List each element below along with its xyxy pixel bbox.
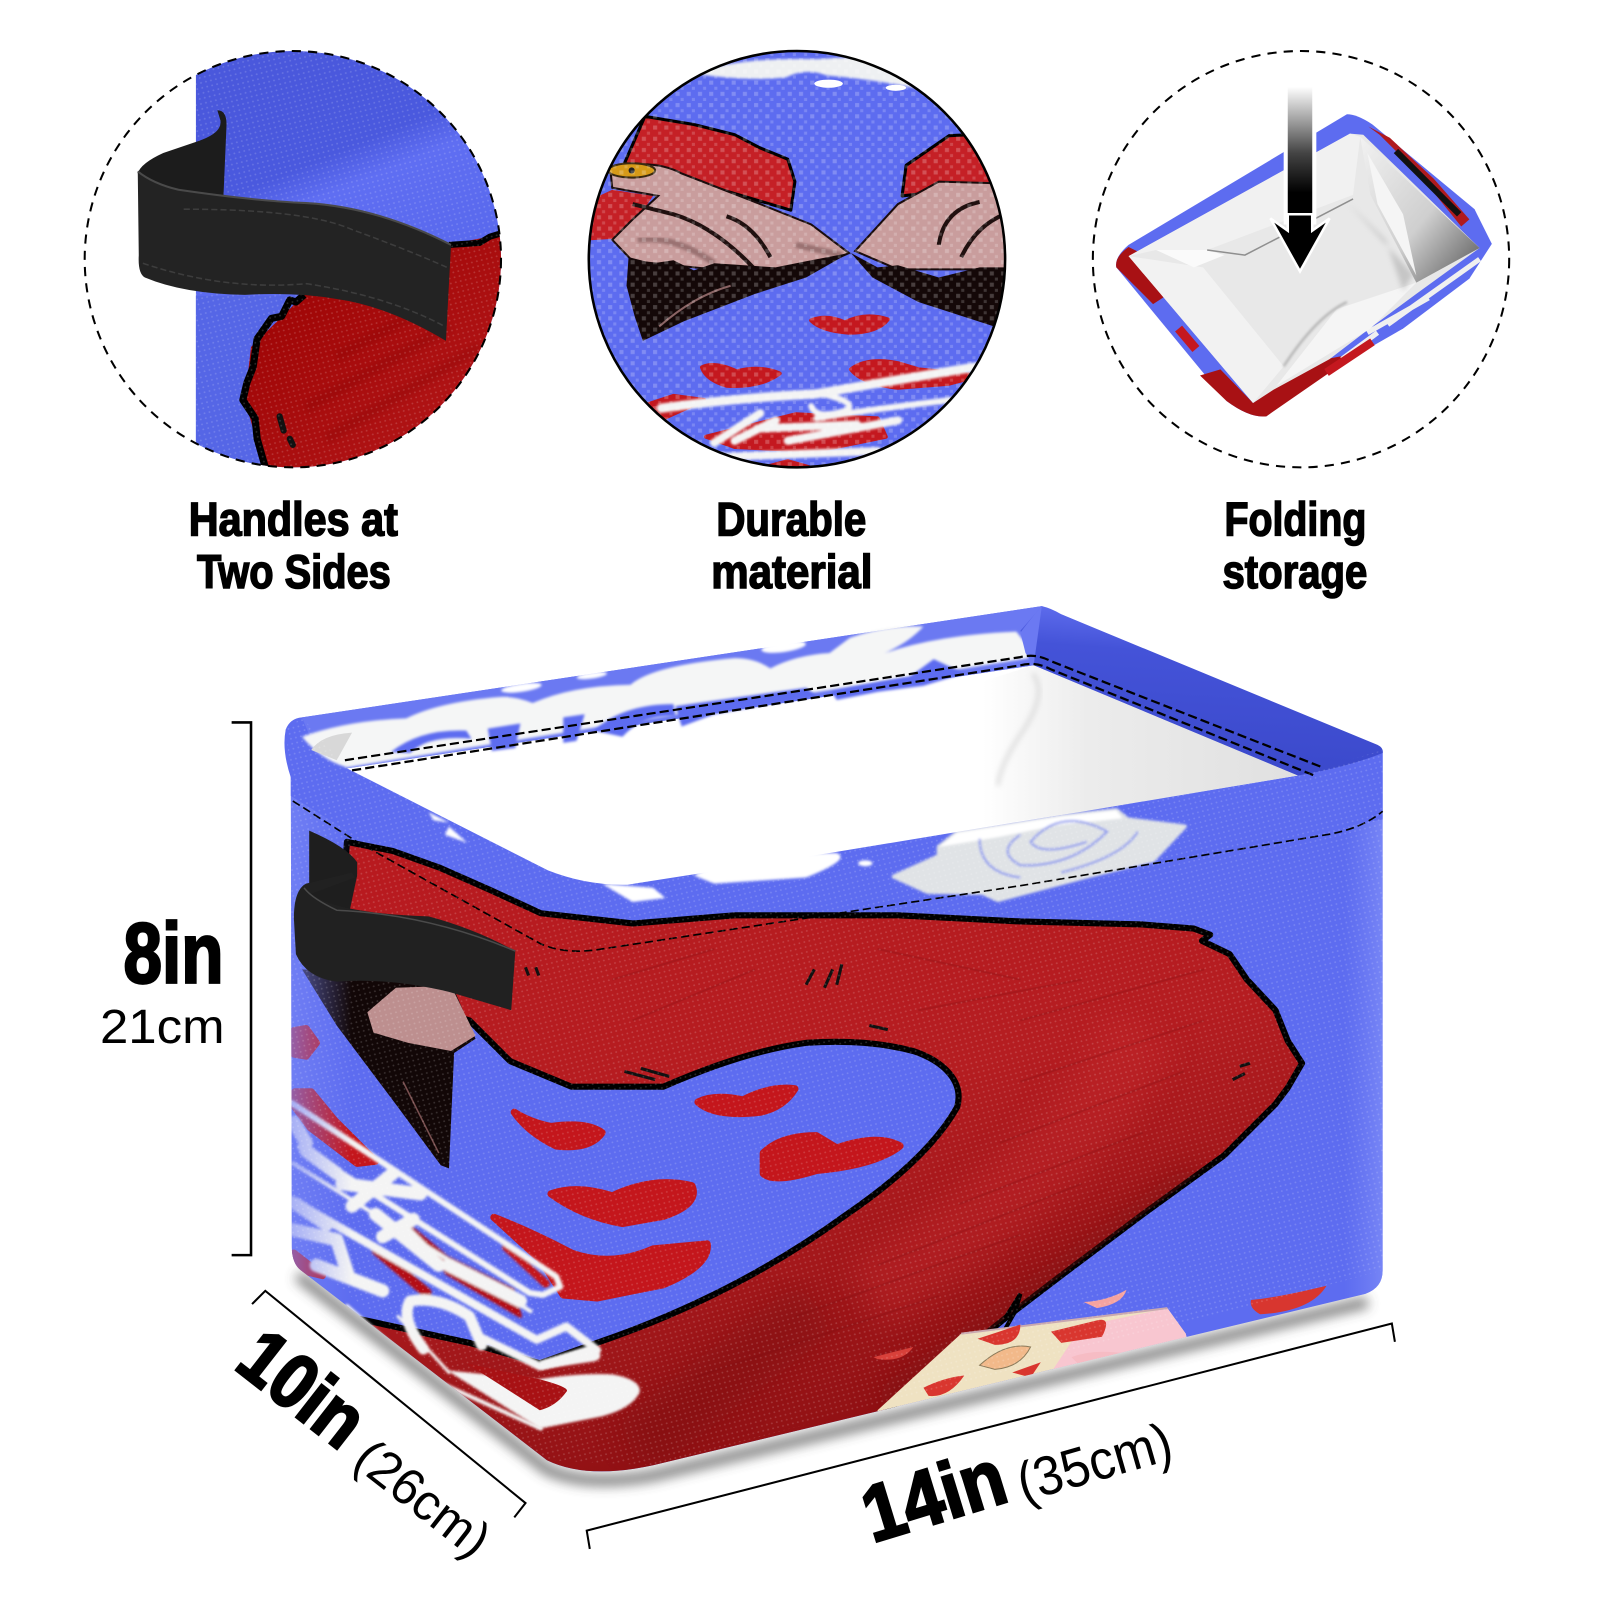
arrow: folding direction (1270, 87, 1330, 271)
dimension: width 10in label: 10in (222, 1313, 383, 1465)
basket ground shadow (298, 1276, 1367, 1480)
small hearts near the card (1084, 1290, 1127, 1308)
dimension: length 35cm label: (35cm) (1010, 1410, 1179, 1514)
dimension: height 8in label: 8in (123, 906, 223, 1002)
caption: handles at two sides: Handles at (189, 494, 398, 546)
rim and body fabric texture (286, 717, 1383, 1465)
dashed circle outline (1093, 51, 1509, 467)
white scroll blob (447, 1370, 640, 1429)
close-up of printed fabric (582, 41, 1012, 480)
panel: handles detail (85, 41, 512, 480)
white lining (1129, 134, 1480, 403)
main basket illustration (284, 606, 1388, 1510)
basket outer body (284, 606, 1383, 1471)
stitching on outer body (293, 801, 1383, 951)
dimension: length bracket (587, 1323, 1395, 1549)
dimension: width 26cm label: (26cm) (344, 1428, 502, 1568)
flamingo head and beak (302, 969, 476, 1168)
icon: black fabric handle (138, 110, 451, 341)
close-up of basket fabric (196, 41, 512, 480)
caption: durable material: material (711, 546, 872, 598)
white cloud prints on rim (429, 812, 872, 902)
Valentine banner lettering (292, 1103, 597, 1429)
panel: folding storage detail (1093, 51, 1509, 467)
white rose print (894, 810, 1185, 900)
dimension: length 14in label: 14in (851, 1432, 1016, 1559)
side handle (294, 831, 539, 1010)
caption: folding storage: storage (1222, 546, 1367, 598)
caption: folding storage: Folding (1224, 494, 1366, 546)
back rim with cloud print (302, 606, 1055, 768)
caption: folding storage (1222, 494, 1367, 598)
dimension: height bracket (232, 722, 251, 1255)
hearts (294, 1029, 900, 1298)
rim blue overlay on the front folded edge (286, 717, 1383, 916)
solid circle outline (589, 51, 1005, 467)
right rim (1020, 606, 1383, 776)
folded basket (1116, 114, 1492, 417)
printed design on front and side (291, 796, 1382, 1472)
love letter card (878, 1307, 1186, 1412)
caption: durable material: Durable (716, 494, 866, 546)
caption: durable material (711, 494, 872, 598)
panel: durable material detail (582, 41, 1012, 480)
fabric highlights (291, 796, 1382, 1295)
basket interior (347, 665, 1298, 885)
caption: handles at two sides (189, 494, 398, 598)
outer fabric edge (1116, 114, 1492, 417)
dimension: height 21cm label: 21cm (100, 1001, 224, 1054)
stitching on inner rim (345, 656, 1322, 776)
dimension: width bracket (252, 1291, 526, 1517)
flamingo body (337, 842, 1302, 1510)
caption: handles at two sides: Two Sides (197, 546, 391, 598)
flamingo shading (633, 1031, 1204, 1449)
dashed circle outline (85, 51, 501, 467)
